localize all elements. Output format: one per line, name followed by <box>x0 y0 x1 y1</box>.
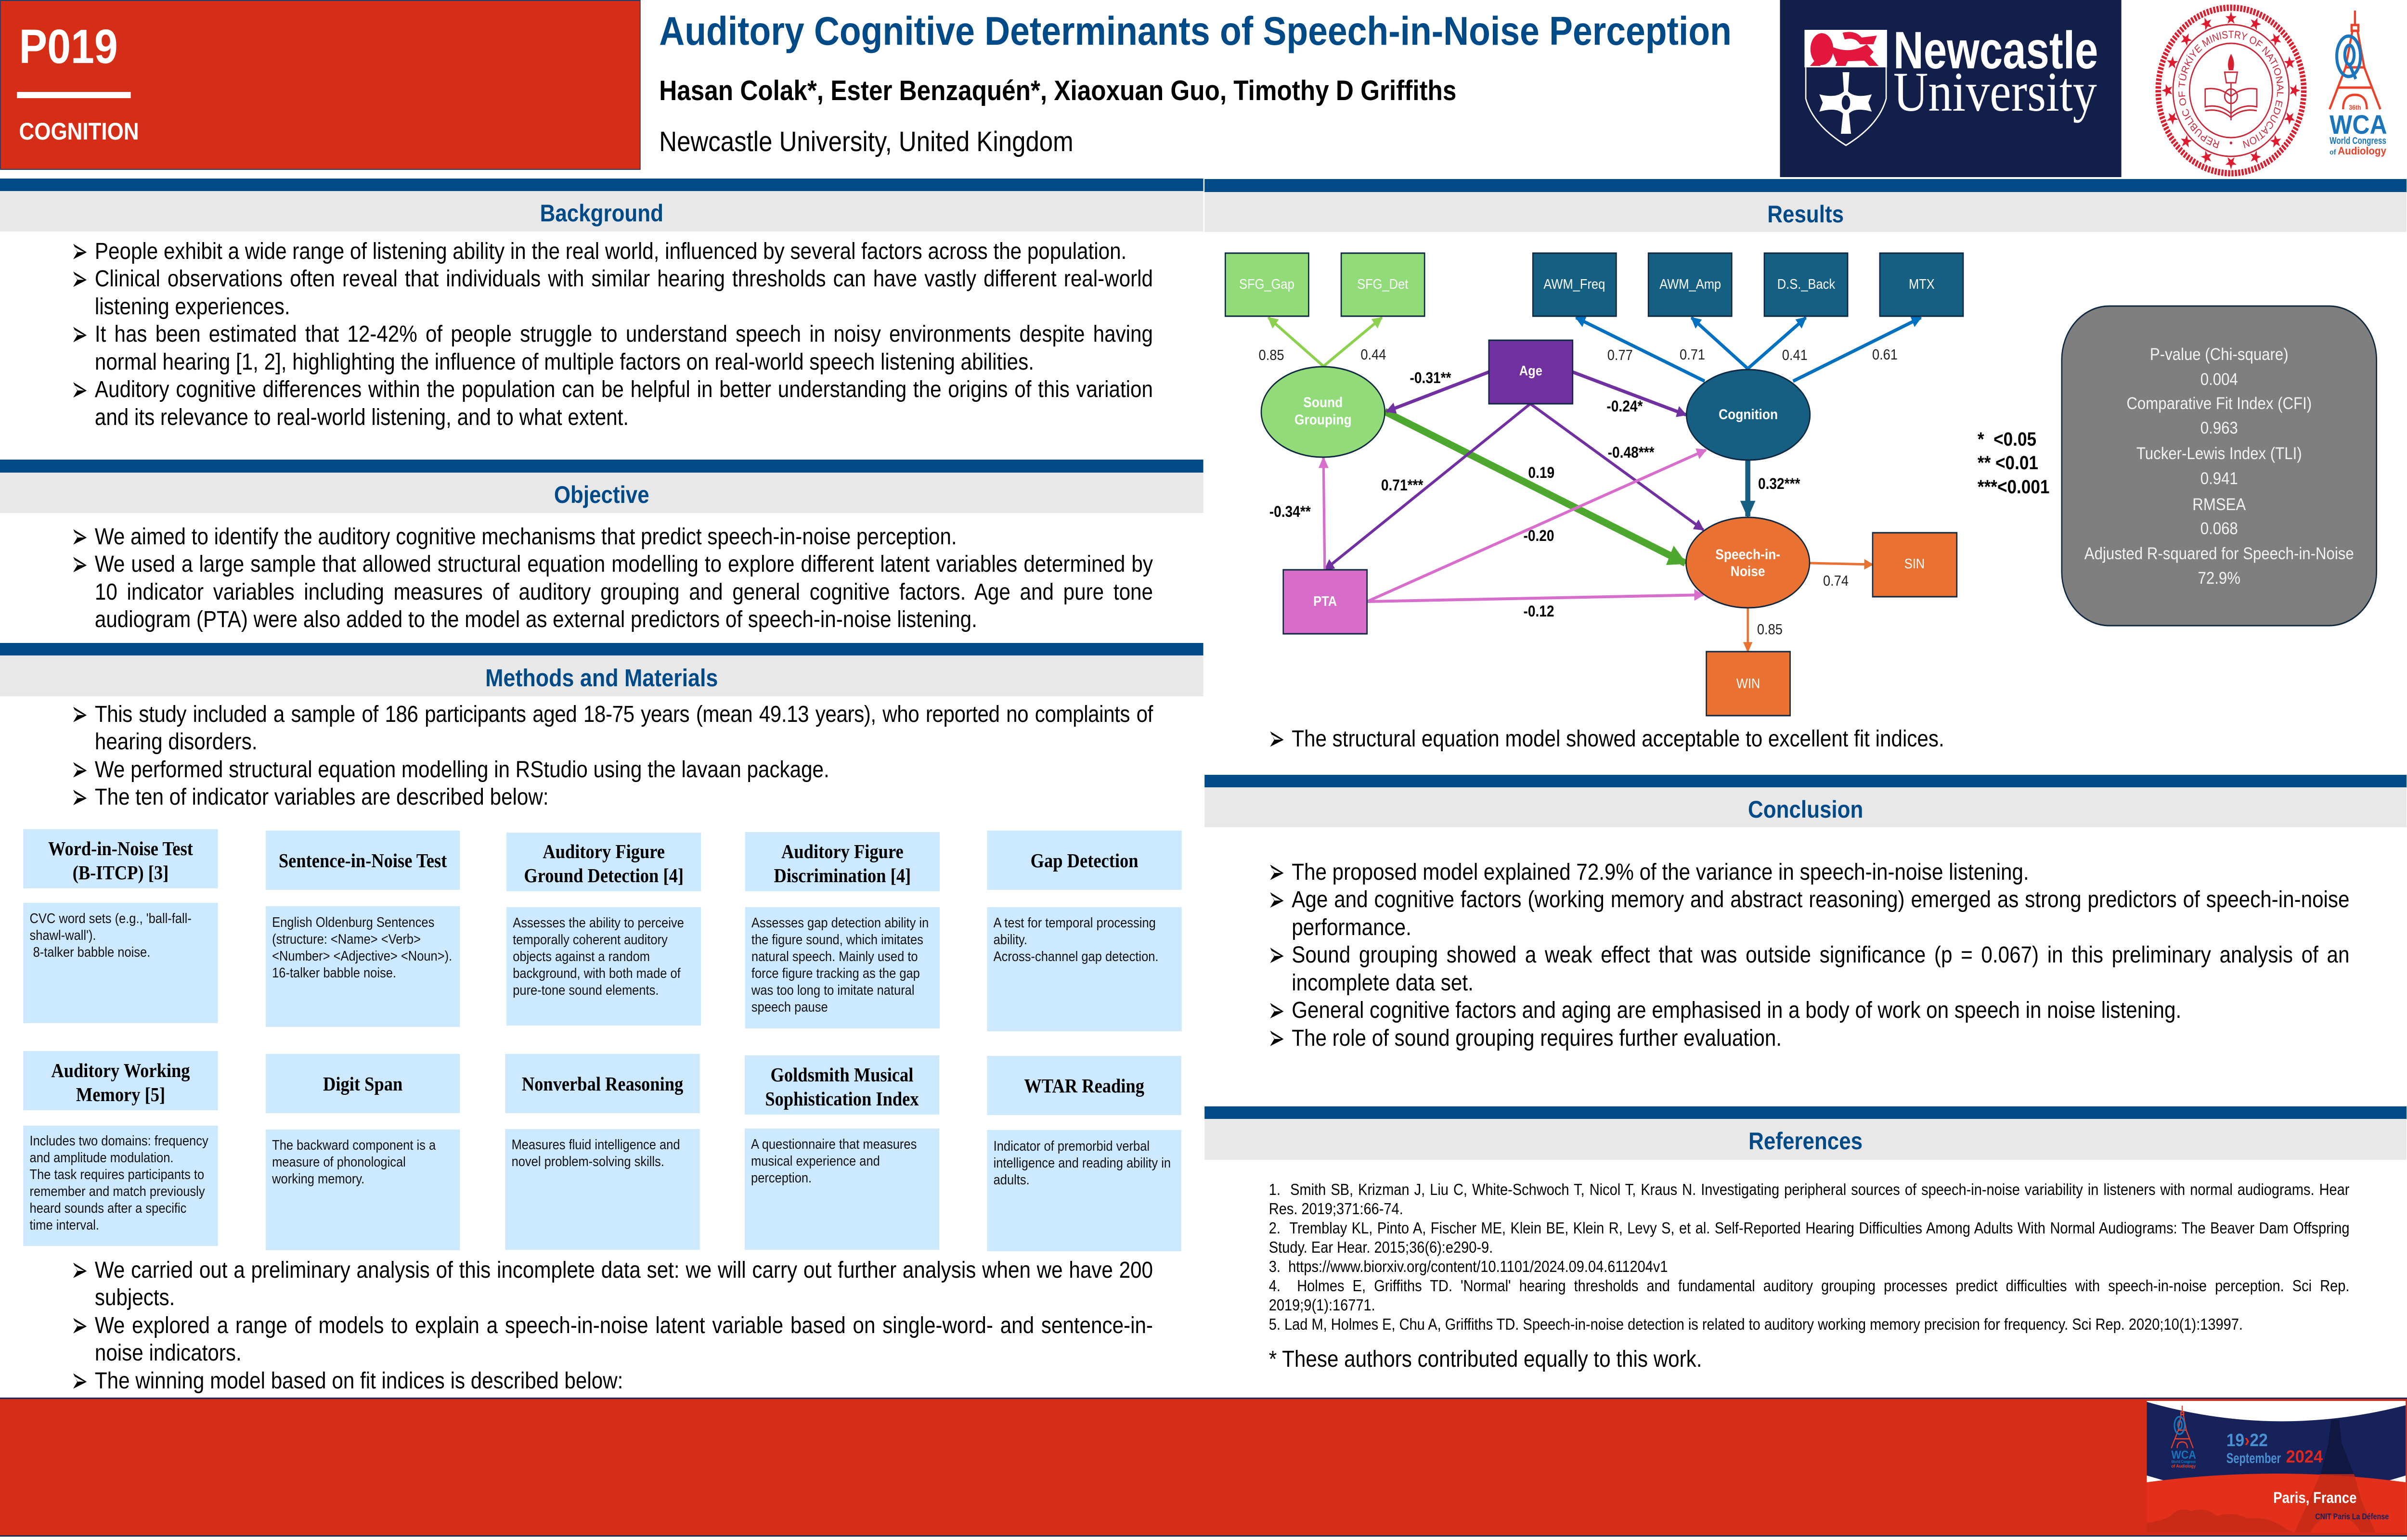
panel: fit indices: 72.9% <box>2198 569 2240 588</box>
banner location: CNIT Paris La Défense <box>2315 1512 2389 1521</box>
panel: methods and materials <box>0 643 1204 1394</box>
banner dates: 2024 <box>2286 1447 2323 1466</box>
logo: Newcastle University: Newcastle <box>1893 20 2098 79</box>
card: goldsmith musical sophistication index: perception. <box>751 1170 812 1186</box>
card: auditory figure discrimination: the figure sound, which imitates <box>751 932 923 947</box>
bullets: methods intro: We performed structural equation modelling in RStudio using the lavaan package. <box>95 757 829 783</box>
node: MTX <box>1880 253 1963 316</box>
node: Sound Grouping <box>1261 367 1385 457</box>
banner location <box>2273 1489 2389 1521</box>
card: sentence-in-noise test <box>266 831 460 1027</box>
card: auditory working memory: heard sounds after a specific <box>30 1201 186 1216</box>
path coefficients: 0.41 <box>1782 347 1808 363</box>
card: sentence-in-noise test: English Oldenburg Sentences <box>272 914 434 930</box>
node: SFG_Gap <box>1225 253 1308 316</box>
heading: methods and materials: Methods and Materials <box>485 664 718 692</box>
card: auditory figure ground detection <box>506 833 701 1026</box>
logo: World Congress of Audiology: WCA <box>2329 110 2387 140</box>
path coefficients: 0.74 <box>1823 573 1849 589</box>
panel: objective <box>0 460 1204 632</box>
legend: significance levels <box>1978 428 2049 497</box>
card: auditory figure discrimination <box>745 832 940 1028</box>
reference list: Study. Ear Hear. 2015;36(6):e290-9. <box>1269 1238 1493 1256</box>
reference list: 2019;9(1):16771. <box>1269 1296 1375 1314</box>
bullets: conclusion: General cognitive factors and aging are emphasised in a body of work on speech in noise listening. <box>1292 998 2181 1023</box>
card: sentence-in-noise test: (structure: <Name> <Verb> <box>272 932 421 947</box>
bullets: background <box>73 239 1153 430</box>
bullets: methods intro: This study included a sample of 186 participants aged 18-75 years (mean 49.13 years), who reported no complaints of <box>95 702 1153 727</box>
node: WIN: WIN <box>1736 675 1760 691</box>
card: auditory working memory: time interval. <box>30 1218 99 1233</box>
card: digit span: Digit Span <box>323 1072 402 1094</box>
banner dates <box>2226 1430 2323 1466</box>
path coefficients: 0.85 <box>1757 621 1783 638</box>
bullets: objective: We aimed to identify the auditory cognitive mechanisms that predict speech-in-noise perception. <box>95 524 957 550</box>
path coefficients: -0.34** <box>1269 503 1311 520</box>
path coefficients: 0.61 <box>1872 346 1898 363</box>
path coefficients: -0.24* <box>1606 398 1643 415</box>
panel: fit indices: 0.068 <box>2200 519 2238 538</box>
panel: fit indices: Comparative Fit Index (CFI) <box>2126 394 2312 413</box>
arrow: sound grouping to speech-in-noise <box>1385 411 1685 563</box>
bullets: objective <box>73 524 1153 632</box>
bullets: conclusion: Age and cognitive factors (working memory and abstract reasoning) emerged as strong predictors of speech-in-noise <box>1292 887 2349 912</box>
node: Speech-in-Noise: Speech-in- <box>1715 546 1780 562</box>
card: goldsmith musical sophistication index: Goldsmith Musical <box>771 1064 913 1086</box>
path coefficients <box>1259 346 1898 638</box>
card: auditory working memory: remember and match previously <box>30 1184 205 1199</box>
bullets: background: It has been estimated that 12-42% of people struggle to understand speech in noisy environments despite having <box>95 321 1153 347</box>
card: auditory figure ground detection: pure-tone sound elements. <box>513 983 659 998</box>
card: word-in-noise test <box>23 829 218 1023</box>
legend: significance levels: ** <0.01 <box>1978 452 2038 473</box>
logo: World Congress of Audiology <box>2329 11 2387 157</box>
card: sentence-in-noise test: 16-talker babble noise. <box>272 965 396 981</box>
node: MTX: MTX <box>1909 276 1935 292</box>
heading: results: Results <box>1767 201 1844 228</box>
reference list <box>1269 1180 2349 1334</box>
logo: World Congress of Audiology: 36th <box>2349 103 2361 111</box>
bullets: background: listening experiences. <box>95 294 290 320</box>
path coefficients: 0.32*** <box>1758 475 1800 492</box>
footer banner: congress Paris 2024 <box>2147 1401 2406 1533</box>
node: SFG_Gap: SFG_Gap <box>1239 276 1294 292</box>
arrows: age paths <box>1325 372 1703 570</box>
path coefficients: 0.44 <box>1360 346 1386 363</box>
path coefficients: -0.20 <box>1523 527 1554 544</box>
bullets: background: and its relevance to real-world listening, and to what extent. <box>95 405 629 430</box>
legend: significance levels: ***<0.001 <box>1978 476 2049 497</box>
arrows: cognition loadings <box>1576 318 1921 381</box>
card: auditory figure discrimination: speech pause <box>751 999 828 1014</box>
arrow: cognition to speech-in-noise <box>1745 460 1751 516</box>
arrows: sound grouping loadings <box>1268 318 1382 366</box>
bullets: background: People exhibit a wide range of listening ability in the real world, influenced by several factors across the population. <box>95 239 1126 264</box>
reference list: 4. Holmes E, Griffiths TD. 'Normal' hearing thresholds and fundamental auditory grouping processes predict difficulties with speech-in-noise perception. Sci Rep. <box>1269 1277 2349 1295</box>
node: AWM_Amp: AWM_Amp <box>1659 276 1721 292</box>
bullets: background: Clinical observations often reveal that individuals with similar hearing thresholds can have vastly different real-world <box>95 266 1153 292</box>
node: PTA <box>1283 570 1367 634</box>
banner dates: September <box>2226 1450 2281 1466</box>
card: nonverbal reasoning: Nonverbal Reasoning <box>522 1072 683 1094</box>
footnote: * These authors contributed equally to this work. <box>1269 1347 1702 1372</box>
icon: congress logo: World Congress <box>2171 1460 2196 1464</box>
panel: results <box>1204 179 2407 775</box>
card: gap detection: ability. <box>994 932 1027 947</box>
card: word-in-noise test: (B-ITCP) [3] <box>73 861 168 884</box>
bullets: conclusion: The role of sound grouping requires further evaluation. <box>1292 1026 1782 1051</box>
node: Speech-in-Noise: Noise <box>1731 563 1765 579</box>
heading: references: References <box>1748 1128 1863 1155</box>
icon: congress logo <box>2171 1406 2196 1469</box>
node: Age <box>1489 340 1573 404</box>
bullets: methods analysis <box>95 1257 1153 1395</box>
bullets: methods intro: The ten of indicator variables are described below: <box>95 784 549 810</box>
reference list: 5. Lad M, Holmes E, Chu A, Griffiths TD. Speech-in-noise detection is related to auditory working memory precision for frequency. Sci Rep. 2020;10(1):13997. <box>1269 1315 2243 1333</box>
card: wtar reading: Indicator of premorbid verbal <box>994 1139 1150 1154</box>
panel: fit indices: Tucker-Lewis Index (TLI) <box>2136 444 2302 463</box>
card: auditory working memory: and amplitude modulation. <box>30 1150 173 1166</box>
node: SFG_Det: SFG_Det <box>1357 276 1409 292</box>
node: Sound Grouping: Sound <box>1303 394 1343 410</box>
card: goldsmith musical sophistication index: A questionnaire that measures <box>751 1137 917 1152</box>
bullets: conclusion <box>1292 859 2349 1052</box>
bullet: model fit: The structural equation model showed acceptable to excellent fit indices. <box>1292 726 1944 752</box>
node: SIN: SIN <box>1904 555 1925 571</box>
card: digit span: working memory. <box>272 1171 364 1187</box>
node: AWM_Freq: AWM_Freq <box>1543 276 1605 292</box>
card: word-in-noise test: 8-talker babble noise. <box>33 944 150 960</box>
bullets: objective: We used a large sample that allowed structural equation modelling to explore different latent variables determined by <box>95 552 1153 577</box>
reference list: 1. Smith SB, Krizman J, Liu C, White-Schwoch T, Nicol T, Kraus N. Investigating peripheral sources of speech-in-noise variability in listeners with normal audiograms. Hear <box>1269 1181 2349 1198</box>
card: gap detection: Gap Detection <box>1031 849 1139 871</box>
bullets: methods analysis: noise indicators. <box>95 1340 242 1366</box>
card: gap detection <box>987 831 1182 1031</box>
bullets: methods intro: hearing disorders. <box>95 729 258 755</box>
node: AWM_Freq <box>1533 253 1616 316</box>
panel: conclusion <box>1204 775 2407 1106</box>
card: auditory figure discrimination: Auditory Figure <box>781 840 904 862</box>
node: SIN <box>1873 533 1957 597</box>
card: sentence-in-noise test: <Number> <Adjective> <Noun>). <box>272 948 452 963</box>
path coefficients: -0.12 <box>1523 603 1554 620</box>
card: auditory figure ground detection: background, with both made of <box>513 965 681 981</box>
card: auditory figure discrimination: was too long to imitate natural <box>751 983 915 998</box>
heading: background: Background <box>540 200 663 227</box>
card: auditory figure ground detection: objects against a random <box>513 949 650 964</box>
panel: fit indices: RMSEA <box>2192 495 2246 514</box>
card: wtar reading: WTAR Reading <box>1024 1074 1144 1096</box>
bullets: background: normal hearing [1, 2], highlighting the influence of multiple factors on real-world speech listening abilities. <box>95 349 1034 375</box>
path coefficients: -0.31** <box>1410 370 1451 386</box>
node: PTA: PTA <box>1313 593 1337 609</box>
chart: structural equation model <box>1206 241 2407 732</box>
logo: ministry seal: REPUBLIC OF TÜRKİYE MINISTRY OF NATIONAL EDUCATION <box>2178 31 2284 148</box>
category: COGNITION <box>19 118 139 145</box>
card: word-in-noise test: CVC word sets (e.g., 'ball-fall- <box>30 911 192 926</box>
card: gap detection: A test for temporal processing <box>994 915 1156 931</box>
node: AWM_Amp <box>1648 253 1732 316</box>
bullets: conclusion: performance. <box>1292 915 1411 940</box>
card: nonverbal reasoning: Measures fluid intelligence and <box>512 1137 680 1152</box>
bullets: conclusion: Sound grouping showed a weak effect that was outside significance (p = 0.067) in this preliminary analysis of an <box>1292 942 2349 968</box>
card: wtar reading <box>987 1056 1181 1251</box>
bullets: methods analysis: We carried out a preliminary analysis of this incomplete data set: we will carry out further analysis when we have 200 <box>95 1258 1153 1283</box>
reference list: 2. Tremblay KL, Pinto A, Fischer ME, Klein BE, Klein R, Levy S, et al. Self-Reported Hearing Difficulties Among Adults With Normal Audiograms: The Beaver Dam Offspring <box>1269 1219 2349 1237</box>
panel: references <box>1204 1106 2407 1398</box>
card: auditory figure ground detection: Ground Detection [4] <box>524 864 684 886</box>
node: SFG_Det <box>1341 253 1424 316</box>
title: Auditory Cognitive Determinants of Speech-in-Noise Perception <box>659 9 1732 53</box>
banner location: Paris, France <box>2273 1489 2356 1506</box>
panel: fit indices: 0.941 <box>2200 469 2238 488</box>
heading: conclusion: Conclusion <box>1748 796 1863 823</box>
card: auditory figure ground detection: Auditory Figure <box>543 840 665 862</box>
bullets: methods analysis: We explored a range of models to explain a speech-in-noise latent variable based on single-word- and sentence-in- <box>95 1313 1153 1338</box>
bullets: objective: audiogram (PTA) were also added to the model as external predictors of speech-in-noise listening. <box>95 607 977 632</box>
node: WIN <box>1707 652 1790 716</box>
path coefficients: -0.48*** <box>1608 444 1655 461</box>
card: gap detection: Across-channel gap detection. <box>994 949 1159 964</box>
bullets: objective: 10 indicator variables including measures of auditory grouping and general cognitive factors. Age and pure tone <box>95 579 1153 605</box>
path coefficients: 0.71*** <box>1381 477 1423 494</box>
icon: congress logo: WCA <box>2171 1448 2196 1461</box>
card: auditory figure discrimination: Discrimination [4] <box>774 864 911 886</box>
arrows: pta paths <box>1323 450 1706 602</box>
card: auditory figure discrimination: force figure tracking as the gap <box>751 965 920 981</box>
poster number: P019 <box>19 20 118 74</box>
panel: fit indices <box>2062 306 2377 626</box>
card: auditory working memory <box>23 1051 218 1246</box>
card: auditory figure discrimination: Assesses gap detection ability in <box>751 915 929 931</box>
reference list: Res. 2019;371:66-74. <box>1269 1200 1403 1218</box>
card: goldsmith musical sophistication index: musical experience and <box>751 1153 880 1168</box>
card: auditory figure ground detection: Assesses the ability to perceive <box>513 915 684 931</box>
logo: World Congress of Audiology: of Audiology <box>2329 145 2386 157</box>
path coefficients: 0.19 <box>1528 464 1554 481</box>
card: auditory figure discrimination: natural speech. Mainly used to <box>751 949 918 964</box>
icon: congress logo: of Audiology <box>2171 1463 2196 1469</box>
header: red poster tag <box>0 0 641 170</box>
authors: Hasan Colak*, Ester Benzaquén*, Xiaoxuan Guo, Timothy D Griffiths <box>659 75 1456 106</box>
card: sentence-in-noise test: Sentence-in-Noise Test <box>279 849 447 871</box>
bullets: conclusion: The proposed model explained 72.9% of the variance in speech-in-noise listening. <box>1292 860 2029 885</box>
reference list: 3. https://www.biorxiv.org/content/10.1101/2024.09.04.611204v1 <box>1269 1258 1668 1275</box>
logo: ministry seal <box>2156 5 2307 176</box>
card: nonverbal reasoning <box>505 1054 700 1250</box>
divider bar <box>17 92 131 98</box>
heading: objective: Objective <box>554 481 649 508</box>
node: D.S._Back: D.S._Back <box>1777 276 1835 292</box>
panel: fit indices: 0.004 <box>2200 370 2238 389</box>
card: goldsmith musical sophistication index <box>745 1055 939 1250</box>
panel: background <box>0 179 1204 430</box>
node: Sound Grouping: Grouping <box>1294 411 1352 427</box>
node: Cognition: Cognition <box>1719 406 1778 422</box>
bullets: methods intro <box>73 702 1153 810</box>
path coefficients: 0.77 <box>1607 347 1633 363</box>
node: D.S._Back <box>1764 253 1848 316</box>
node: Speech-in-Noise <box>1686 517 1810 608</box>
card: wtar reading: intelligence and reading ability in <box>994 1155 1171 1170</box>
card: auditory working memory: Auditory Working <box>51 1059 190 1081</box>
card: auditory working memory: The task requires participants to <box>30 1167 204 1182</box>
card: word-in-noise test: Word-in-Noise Test <box>48 837 193 860</box>
panel: fit indices: P-value (Chi-square) <box>2150 345 2289 364</box>
card: auditory working memory: Includes two domains: frequency <box>30 1133 208 1149</box>
card: goldsmith musical sophistication index: Sophistication Index <box>765 1088 919 1110</box>
panel: fit indices: Adjusted R-squared for Speech-in-Noise <box>2084 544 2354 563</box>
panel: fit indices: 0.963 <box>2200 419 2238 437</box>
node: Age: Age <box>1519 362 1542 378</box>
card: word-in-noise test: shawl-wall'). <box>30 928 96 943</box>
banner dates: 19›22 <box>2226 1430 2268 1450</box>
card: digit span: measure of phonological <box>272 1154 406 1169</box>
bullets: conclusion: incomplete data set. <box>1292 970 1474 996</box>
path coefficients: 0.85 <box>1259 347 1284 363</box>
card: wtar reading: adults. <box>994 1172 1030 1188</box>
card: auditory figure ground detection: temporally coherent auditory <box>513 932 668 947</box>
logo: Newcastle University <box>1780 0 2122 177</box>
path coefficients: 0.71 <box>1680 346 1705 363</box>
footer: red band <box>0 1398 2407 1537</box>
node: Cognition <box>1686 370 1810 460</box>
bullets: methods analysis: The winning model based on fit indices is described below: <box>95 1368 623 1394</box>
arrows: speech-in-noise loadings <box>1748 563 1873 652</box>
card: nonverbal reasoning: novel problem-solving skills. <box>512 1154 664 1169</box>
logo: Newcastle University: University <box>1893 61 2097 123</box>
bullets: background: Auditory cognitive differences within the population can be helpful in better understanding the origins of this variation <box>95 377 1153 402</box>
affiliation: Newcastle University, United Kingdom <box>659 126 1074 157</box>
card: digit span <box>266 1054 460 1250</box>
card: digit span: The backward component is a <box>272 1138 436 1153</box>
bullets: methods analysis: subjects. <box>95 1285 175 1310</box>
legend: significance levels: * <0.05 <box>1978 428 2036 449</box>
card: auditory working memory: Memory [5] <box>76 1083 165 1105</box>
